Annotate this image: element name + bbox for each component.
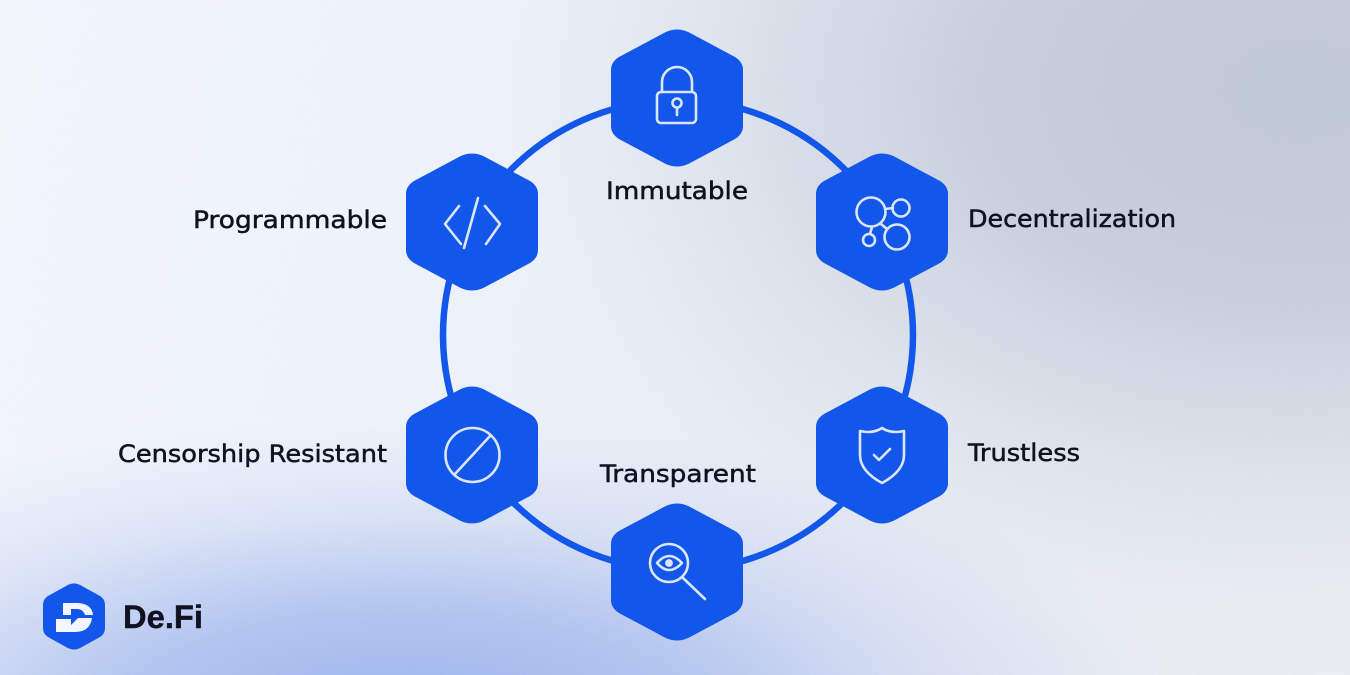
label: Censorship Resistant: Censorship Resistant [118,440,387,468]
node: Censorship Resistant [118,386,538,524]
ring connecting the six properties [443,100,913,570]
icon: magnifier with eye [650,544,705,599]
node: Trustless [816,386,1080,524]
label: Immutable: Immutable [606,177,748,205]
logo mark [43,584,105,650]
icon: connected circles [856,198,910,250]
icon: prohibition sign [446,428,500,482]
node: Decentralization [816,154,1176,290]
label: Decentralization: Decentralization [968,205,1176,233]
node: Transparent [599,460,756,640]
logo: De.Fi [43,584,203,650]
label: Transparent: Transparent [599,460,756,488]
node: Immutable [606,30,748,205]
node: Programmable [193,154,538,290]
label: Trustless: Trustless [967,439,1080,467]
icon: shield with check [860,428,904,483]
label: Programmable: Programmable [193,206,387,234]
icon: padlock [657,67,696,123]
icon: code brackets [445,198,500,248]
logo wordmark: De.Fi [123,599,203,635]
